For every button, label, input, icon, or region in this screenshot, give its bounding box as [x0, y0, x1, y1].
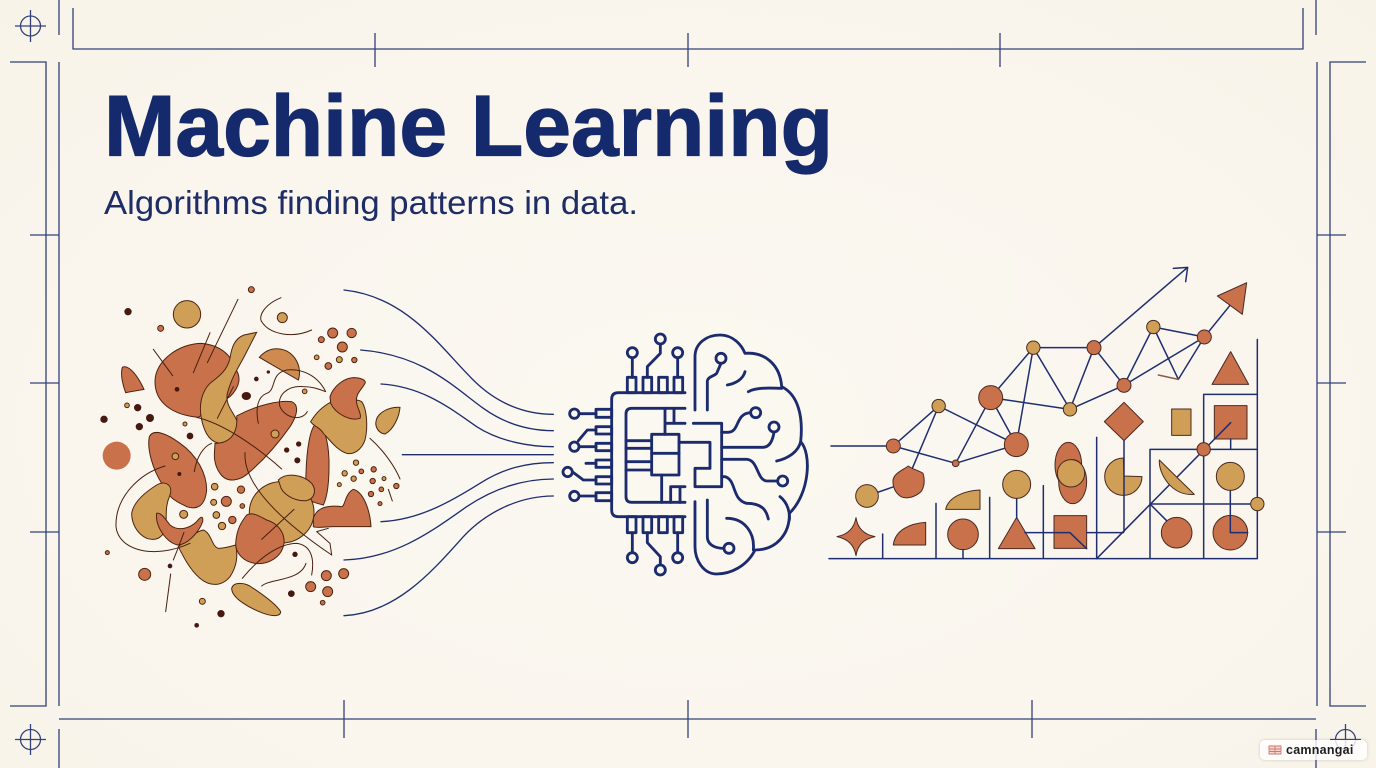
subtitle: Algorithms finding patterns in data. [104, 184, 638, 221]
icon: chip and brain [563, 334, 807, 575]
connected shapes [856, 462, 1244, 507]
watermark badge [1260, 740, 1367, 760]
half disc [1159, 460, 1194, 494]
watermark badge: camnangai [1286, 743, 1354, 757]
terracotta dots [103, 287, 399, 605]
illustration: chaotic raw data shapes [100, 287, 400, 628]
icon: book [1268, 746, 1282, 754]
brain nodes [716, 353, 788, 553]
chip circuit [573, 344, 722, 565]
brain outline [695, 335, 807, 574]
network edges and arrow [831, 267, 1232, 468]
crosshair bottom right [1330, 724, 1361, 755]
crosshair top left [15, 10, 46, 42]
crosshair bottom left [15, 724, 46, 755]
circuit nodes [563, 334, 683, 575]
flow lines converging into chip [344, 290, 553, 616]
ochre dots [125, 301, 386, 604]
illustration: ordered shapes and rising network [829, 267, 1264, 559]
dark dots [100, 308, 301, 628]
network nodes [886, 320, 1264, 511]
organic blobs [122, 332, 400, 616]
thin scribble lines [116, 298, 400, 612]
shapes in grid [837, 352, 1249, 556]
title: Machine Learning [104, 78, 833, 174]
grid lines and diagonal [829, 339, 1257, 559]
arrowhead triangle [1217, 283, 1247, 314]
